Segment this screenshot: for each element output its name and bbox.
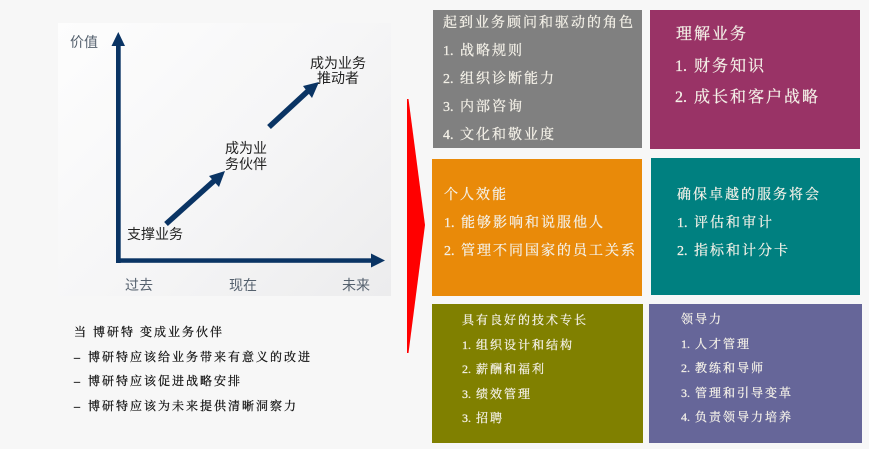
panel: advisor and driver role: 4. 文化和敬业度: [443, 128, 556, 143]
axis label: future: 未来: [342, 277, 370, 293]
panel: understanding the business: [650, 10, 860, 149]
text block: becoming a business partner: – 博研特应该促进战略安排: [74, 374, 242, 388]
text block: becoming a business partner: – 博研特应该给业务带来有意义的改进: [74, 350, 312, 364]
panel: personal effectiveness: [432, 159, 642, 296]
panel: understanding the business: 理解业务: [676, 26, 748, 43]
text block: becoming a business partner: [74, 325, 312, 413]
panel: technical expertise: 具有良好的技术专长: [462, 313, 588, 327]
panel: leadership: 领导力: [681, 312, 723, 326]
panel: technical expertise: [432, 304, 643, 443]
stage label: support the business: 支撑业务: [127, 226, 183, 242]
stage label: business driver: 推动者: [317, 70, 359, 86]
axis label: value: 价值: [70, 34, 98, 50]
panel: leadership: [649, 304, 862, 443]
panel: advisor and driver role: 1. 战略规则: [443, 44, 524, 59]
panel: technical expertise: 2. 薪酬和福利: [462, 362, 546, 376]
panel: advisor and driver role: 3. 内部咨询: [443, 100, 524, 115]
panel: technical expertise: 3. 招聘: [462, 411, 504, 425]
text block: becoming a business partner: – 博研特应该为未来提供清晰洞察力: [74, 399, 298, 413]
panel: understanding the business: 2. 成长和客户战略: [675, 89, 820, 106]
panel: service excellence: [651, 158, 860, 295]
stage label: business partner: [225, 140, 267, 172]
panel: advisor and driver role: 2. 组织诊断能力: [443, 72, 556, 87]
panel: service excellence: 2. 指标和计分卡: [677, 244, 790, 259]
stage label: business driver: [310, 55, 366, 86]
panel: leadership: 1. 人才管理: [681, 337, 751, 351]
panel: advisor and driver role: 起到业务顾问和驱动的角色: [443, 16, 635, 31]
stage label: business partner: 务伙伴: [225, 156, 267, 172]
panel: personal effectiveness: 1. 能够影响和说服他人: [444, 216, 605, 231]
panel: personal effectiveness: 2. 管理不同国家的员工关系: [444, 244, 637, 259]
stage label: business partner: 成为业: [225, 140, 267, 156]
panel: advisor and driver role: [433, 10, 642, 148]
chart axes and growth arrows: [112, 32, 385, 268]
stage label: business driver: 成为业务: [310, 55, 366, 71]
axis label: past: 过去: [125, 277, 153, 293]
panel: understanding the business: 1. 财务知识: [675, 58, 766, 75]
arrow: red pointer: [407, 99, 425, 353]
panel: service excellence: 确保卓越的服务将会: [677, 188, 821, 203]
panel: technical expertise: 3. 绩效管理: [462, 387, 532, 401]
panel: leadership: 3. 管理和引导变革: [681, 386, 793, 400]
panel: service excellence: 1. 评估和审计: [677, 216, 774, 231]
text block: becoming a business partner: 当 博研特 变成业务伙伴: [74, 325, 224, 339]
panel: leadership: 2. 教练和导师: [681, 361, 765, 375]
axis label: present: 现在: [229, 277, 257, 293]
panel: leadership: 4. 负责领导力培养: [681, 410, 793, 424]
panel: value chart: [58, 23, 391, 296]
panel: personal effectiveness: 个人效能: [444, 188, 508, 203]
panel: technical expertise: 1. 组织设计和结构: [462, 338, 574, 352]
